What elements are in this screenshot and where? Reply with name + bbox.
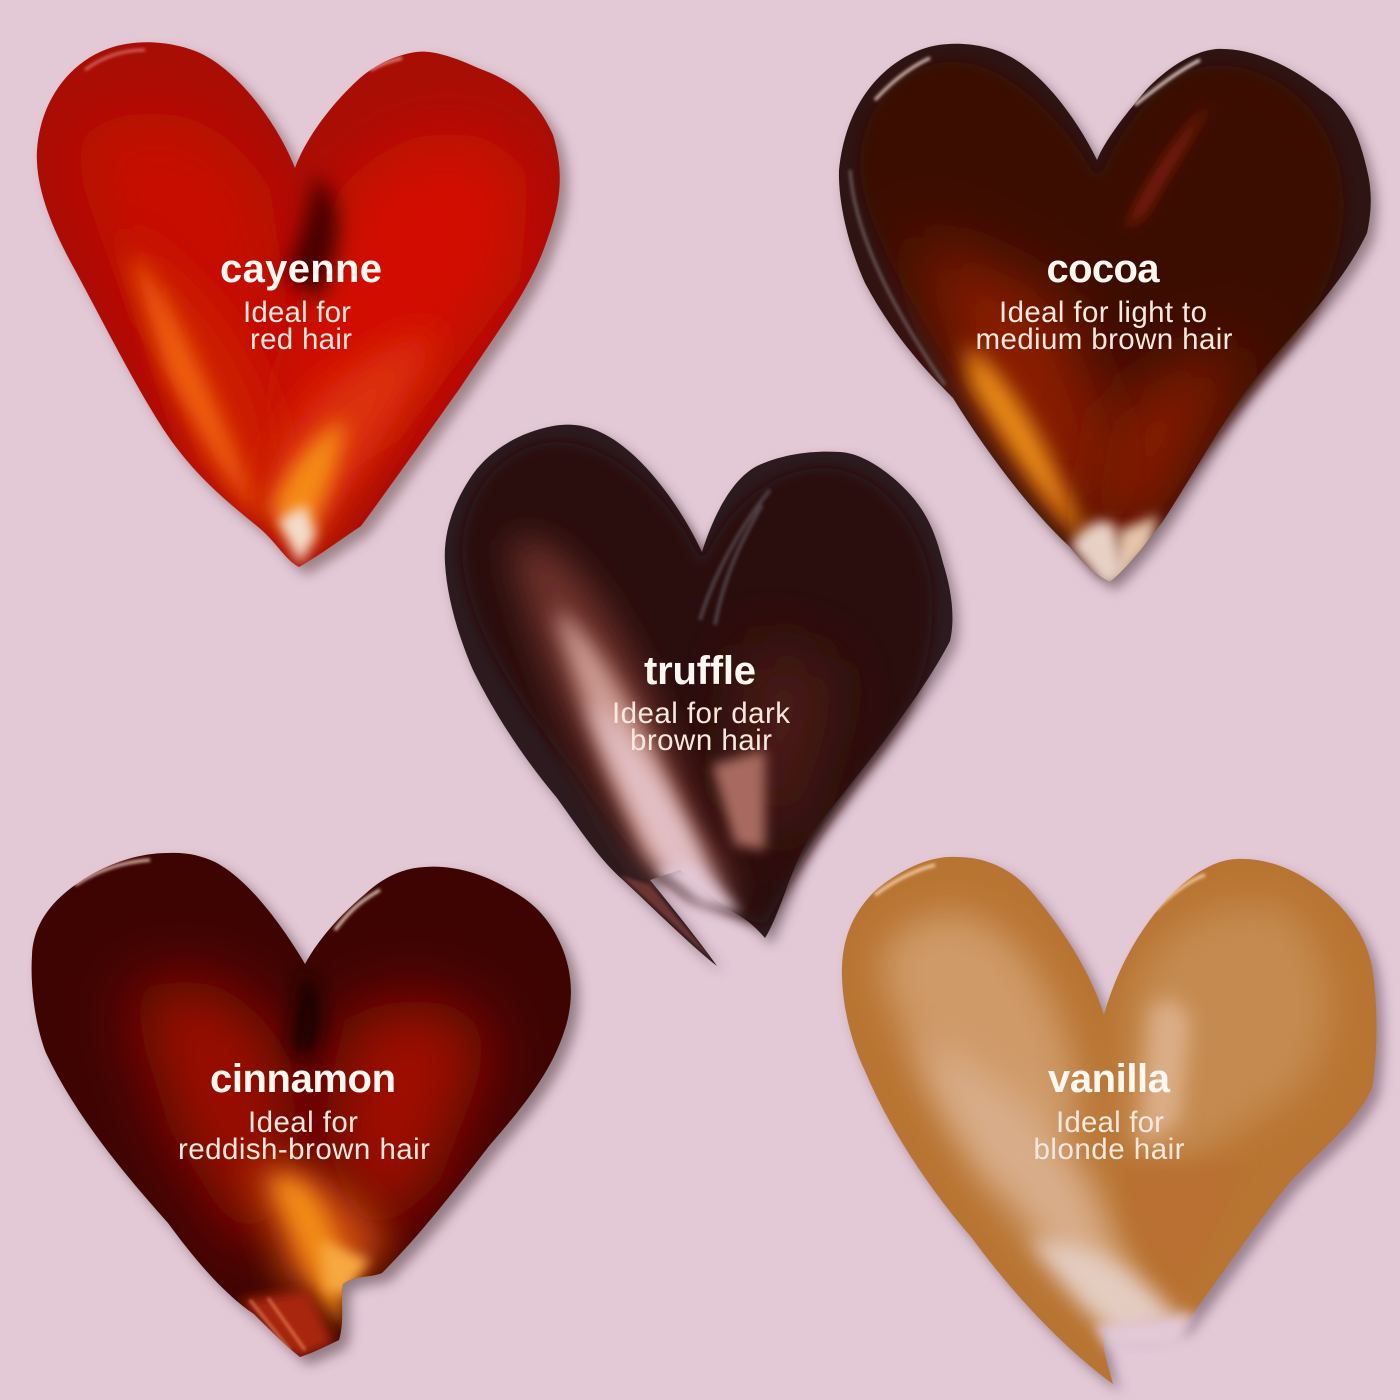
panel: cocoa heart (839, 44, 1377, 590)
label: cinnamon (178, 1057, 430, 1166)
label: cayenne: cayenne (220, 247, 382, 291)
label: vanilla: vanilla (1048, 1057, 1171, 1101)
panel: cinnamon heart (32, 853, 579, 1365)
streak fade: truffle (655, 862, 742, 912)
label: cinnamon: cinnamon (210, 1057, 396, 1101)
panel: truffle heart (445, 425, 958, 973)
tip fade: vanilla (1095, 1312, 1195, 1350)
label: cocoa: Ideal for light to (999, 296, 1207, 329)
label: cocoa (976, 247, 1233, 356)
label: vanilla: Ideal for (1056, 1106, 1164, 1139)
label: truffle: brown hair (630, 724, 772, 757)
label: vanilla: blonde hair (1034, 1133, 1185, 1166)
label: cinnamon: reddish-brown hair (178, 1133, 430, 1166)
label: cayenne: Ideal for (243, 296, 351, 329)
label: truffle: truffle (644, 649, 756, 693)
label: cocoa: medium brown hair (976, 323, 1233, 356)
panel: vanilla heart (842, 857, 1384, 1392)
label: truffle (612, 649, 790, 757)
panel: cayenne heart (37, 42, 568, 575)
label: cayenne: red hair (250, 323, 352, 356)
label: cocoa: cocoa (1046, 247, 1160, 291)
label: cayenne (220, 247, 382, 356)
label: cinnamon: Ideal for (248, 1106, 358, 1139)
label: truffle: Ideal for dark (612, 697, 790, 730)
label: vanilla (1034, 1057, 1185, 1166)
